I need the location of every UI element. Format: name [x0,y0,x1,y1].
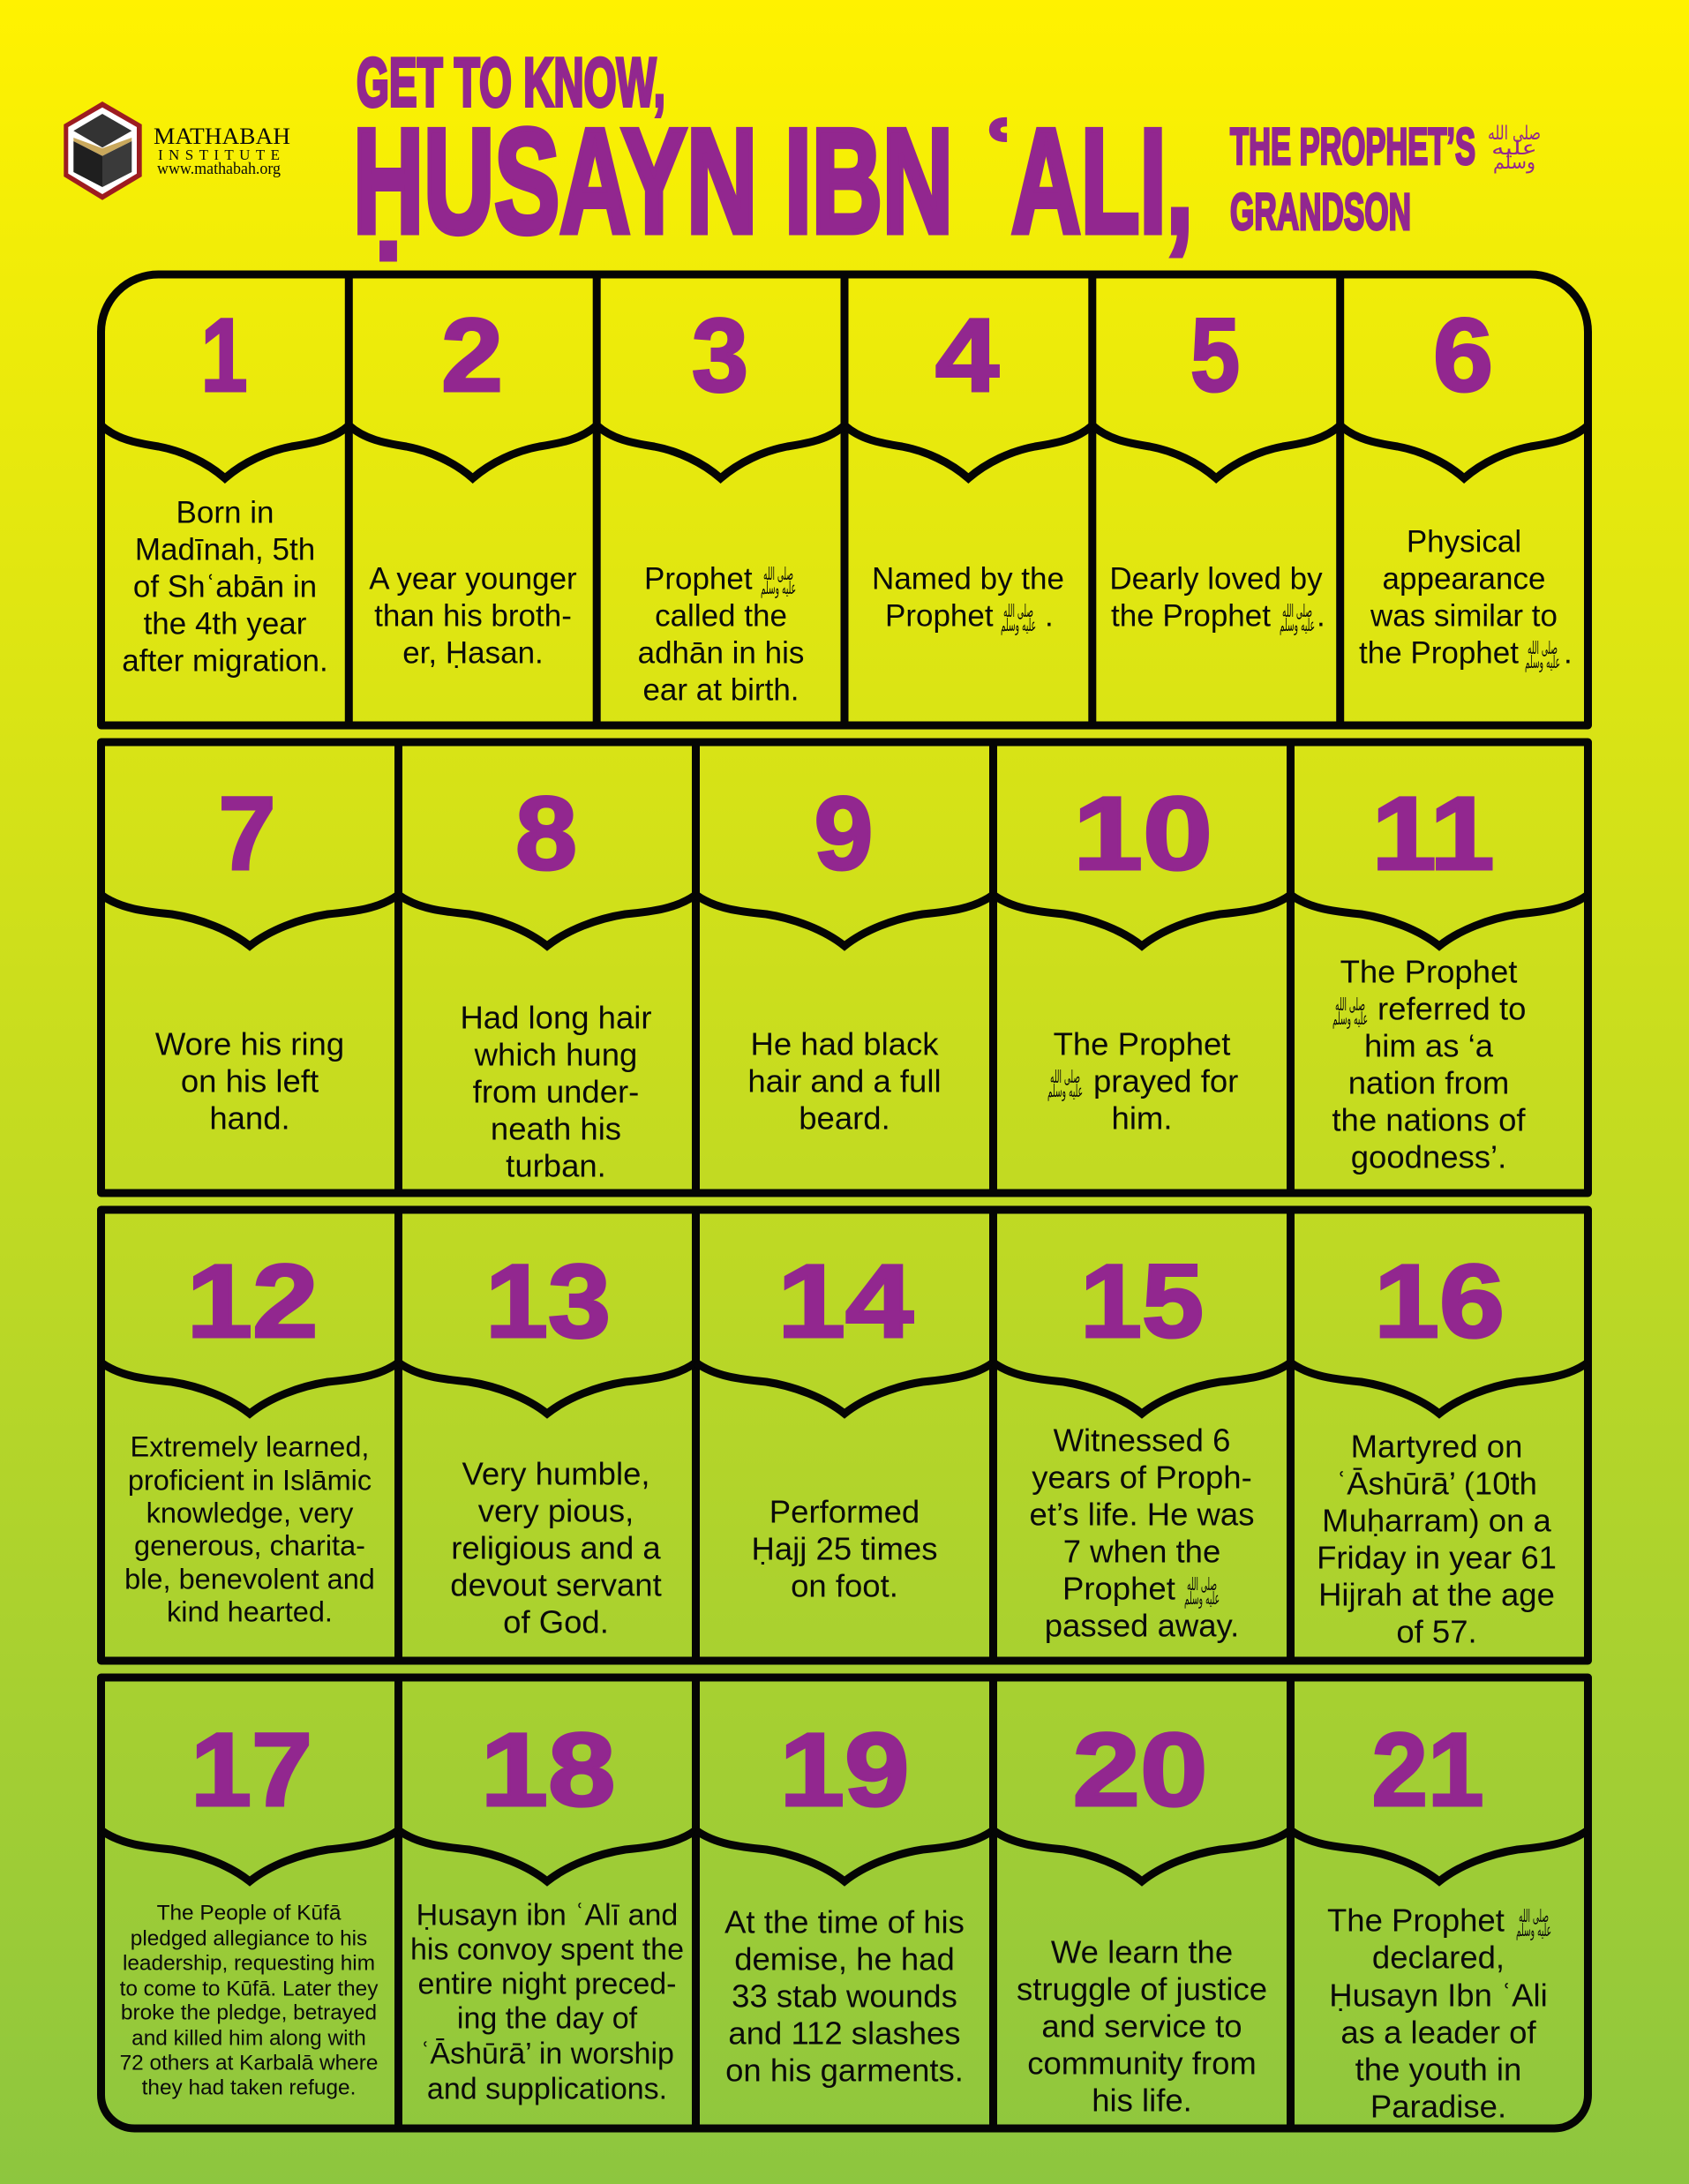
fact 4: . [1045,598,1054,634]
subtitle: the prophet's: THE PROPHET’S [1230,118,1475,176]
fact 11: The Prophet [1340,953,1517,990]
fact 18: entire night preced- [418,1968,676,2001]
fact 12: kind hearted. [167,1595,333,1627]
fact 19: on his garments. [725,2053,964,2088]
fact 1: Madīnah, 5th [135,533,315,567]
icon: honorific [761,563,796,598]
fact 15 [994,1243,1290,1643]
fact 21: Ḥusayn Ibn ʿAli [1329,1977,1548,2014]
fact 14: 14 [777,1243,913,1360]
fact 7: on his left [181,1062,319,1100]
fact 17: 17 [191,1712,312,1828]
fact 8: neath his [491,1110,621,1147]
fact 1: the 4th year [144,607,307,641]
fact 8: 8 [515,776,577,892]
fact 19: demise, he had [734,1941,955,1977]
fact 12: ble, benevolent and [124,1564,375,1595]
fact 19: and 112 slashes [728,2015,961,2051]
fact 18: his convoy spent the [410,1933,684,1966]
fact 15: 15 [1080,1243,1204,1360]
fact 11 [1290,776,1588,1175]
fact 5: . [1317,598,1325,634]
fact 21: declared, [1372,1940,1505,1975]
fact 13: Very humble, [462,1456,650,1491]
fact 7 [101,776,399,1137]
heading: ayn mark: ʿ [976,101,1020,229]
fact 18: ʿĀshūrā’ in worship [420,2037,674,2070]
fact 13: devout servant [450,1567,662,1602]
fact 20: We learn the [1051,1934,1233,1970]
fact 11: 11 [1371,776,1495,892]
fact 18: ing the day of [457,2001,638,2035]
fact 11: referred to [1377,990,1526,1027]
fact 16: Martyred on [1351,1428,1522,1465]
fact 17: and killed him along with [131,2026,366,2051]
fact 12: 12 [187,1243,318,1360]
icon: honorific calligraphy: عليه [1491,138,1537,160]
fact 11: him as ‘a [1364,1027,1494,1064]
fact 11: nation from [1348,1064,1509,1101]
icon: hexagon Kaaba [64,101,142,200]
fact 5: the Prophet [1111,598,1271,634]
fact 17: The People of Kūfā [157,1901,342,1925]
subtitle: grandson: GRANDSON [1230,184,1411,241]
fact 16: Muḥarram) on a [1322,1502,1552,1539]
heading: get to know: GET TO KNOW, [357,43,665,121]
fact 5: Dearly loved by [1109,561,1323,597]
fact 3: adhān in his [638,635,804,671]
fact 21: عليه وسلم [1516,1919,1551,1940]
fact 12: knowledge, very [146,1497,354,1528]
fact 21 [1290,1712,1588,2125]
fact 8 [399,776,695,1184]
logo wordmark: INSTITUTE [158,146,280,163]
fact 17: broke the pledge, betrayed [121,2001,377,2024]
fact 10: him. [1112,1100,1172,1137]
fact 21: the youth in [1355,2051,1521,2088]
fact 3: called the [655,598,787,634]
fact 14 [695,1243,994,1604]
icon: honorific calligraphy: صلى الله [1488,123,1541,145]
fact 21: صلى الله [1519,1905,1549,1926]
fact 6: صلى الله [1528,637,1558,658]
fact 18: and supplications. [427,2072,667,2105]
fact 3: ear at birth. [642,672,799,708]
fact 21: Paradise. [1370,2088,1506,2125]
fact 13: 13 [485,1243,611,1360]
fact 18: 18 [480,1712,616,1828]
fact 14: Performed [769,1493,920,1530]
fact 4: 4 [935,297,999,414]
fact 6: 6 [1433,297,1493,414]
fact 17: to come to Kūfā. Later they [120,1977,379,2001]
fact 3: عليه وسلم [761,577,796,598]
fact 4: صلى الله [1003,600,1033,621]
fact 15: 7 when the [1063,1534,1220,1569]
fact 12: Extremely learned, [131,1431,369,1463]
fact 2: A year younger [369,561,577,597]
fact 20: and service to [1041,2008,1242,2044]
fact 15: صلى الله [1187,1573,1217,1595]
fact 6: appearance [1383,561,1545,597]
fact 19: 33 stab wounds [732,1978,957,2014]
fact 17 [101,1712,399,2100]
heading: Husayn ibn: ḤUSAYN IBN [353,98,953,264]
fact 6: the Prophet [1359,635,1519,671]
fact 20: his life. [1092,2083,1192,2118]
fact 8: turban. [506,1147,606,1184]
fact 15: Prophet [1062,1571,1175,1606]
fact 13: of God. [503,1604,609,1640]
fact 1 [101,297,349,678]
logo wordmark: www.mathabah.org [157,160,281,178]
fact 19 [695,1712,994,2088]
fact 4: عليه وسلم [1001,614,1036,635]
fact 3: صلى الله [763,563,793,584]
fact 20 [994,1712,1290,2118]
fact 9 [695,776,994,1137]
fact 17: leadership, requesting him [123,1952,375,1975]
fact 17: 72 others at Karbalā where [120,2051,378,2075]
fact 18: Ḥusayn ibn ʿAlī and [417,1899,678,1933]
fact 6: . [1564,635,1573,671]
fact 15: et’s life. He was [1030,1497,1254,1532]
fact 11: صلى الله [1335,994,1365,1015]
fact 2 [349,297,597,671]
fact 12: generous, charita- [134,1530,365,1562]
fact 6: was similar to [1370,598,1558,634]
title [353,43,1541,264]
fact 8: from under- [473,1073,639,1110]
fact 19: 19 [780,1712,909,1828]
fact 3 [597,297,844,708]
fact 6: Physical [1407,524,1521,559]
fact 8: which hung [474,1036,637,1073]
fact 9: He had black [750,1025,939,1062]
panel: row 2 facts [101,742,1588,1193]
fact 9: beard. [799,1100,890,1137]
fact 5: عليه وسلم [1280,614,1315,635]
fact 16 [1290,1243,1588,1650]
fact 5: صلى الله [1282,600,1312,621]
icon: honorific [1332,994,1368,1029]
fact 4: Prophet [885,598,994,634]
fact 3: Prophet [644,561,753,597]
fact 4 [844,297,1092,635]
icon: honorific [1525,637,1560,672]
fact 16: 16 [1374,1243,1505,1360]
fact 9: hair and a full [747,1062,942,1100]
fact 2: er, Ḥasan. [402,635,544,671]
fact 11: عليه وسلم [1332,1008,1368,1029]
fact 3: 3 [692,297,748,414]
icon: honorific [1184,1573,1220,1609]
fact 16: Hijrah at the age [1318,1576,1555,1613]
fact 18 [399,1712,695,2105]
fact 15: years of Proph- [1032,1460,1252,1495]
fact 14: on foot. [791,1567,898,1604]
fact 6 [1340,297,1588,672]
icon: honorific calligraphy [1488,123,1541,174]
fact 1: of Shʿabān in [133,570,317,604]
fact 11: goodness’. [1351,1138,1506,1175]
fact 21: The Prophet [1327,1903,1505,1938]
fact 1: Born in [176,496,274,529]
fact 20: struggle of justice [1017,1971,1267,2007]
icon: honorific [1001,600,1036,635]
fact 12 [101,1243,399,1627]
fact 17: pledged allegiance to his [131,1927,367,1950]
panel: row 1 facts [101,274,1588,725]
fact 4: Named by the [872,561,1064,597]
fact 2: than his broth- [374,598,572,634]
fact 17: they had taken refuge. [142,2075,356,2100]
fact 20: 20 [1073,1712,1207,1828]
fact 2: 2 [441,297,503,414]
heading: Ali: ALI, [1011,98,1193,264]
panel: row 3 facts [101,1210,1588,1661]
fact 14: Ḥajj 25 times [752,1530,937,1567]
fact 7: Wore his ring [155,1025,344,1062]
fact 5: 5 [1190,297,1240,414]
fact 13: very pious, [478,1493,634,1528]
fact 13: religious and a [451,1530,661,1565]
fact 9: 9 [814,776,874,892]
logo: Mathabah Institute [64,101,290,200]
fact 20: community from [1027,2045,1257,2081]
fact 10: The Prophet [1054,1025,1230,1062]
icon: honorific calligraphy: وسلم [1493,152,1535,174]
fact 5 [1092,297,1340,635]
panel: row 4 facts [101,1677,1588,2128]
fact 7: hand. [209,1100,290,1137]
fact 10: prayed for [1093,1062,1238,1100]
fact 6: عليه وسلم [1525,651,1560,672]
fact 21: 21 [1371,1712,1484,1828]
fact 16: ʿĀshūrā’ (10th [1336,1465,1537,1502]
icon: honorific [1047,1066,1083,1101]
fact 8: Had long hair [460,999,652,1036]
fact 10: عليه وسلم [1047,1080,1083,1101]
fact 10 [994,776,1290,1137]
fact 10: صلى الله [1050,1066,1080,1087]
fact 15: Witnessed 6 [1054,1422,1230,1458]
fact 11: the nations of [1332,1101,1526,1138]
fact 15: عليه وسلم [1184,1587,1220,1609]
fact 21: as a leader of [1340,2014,1536,2051]
fact 7: 7 [219,776,275,892]
fact 16: Friday in year 61 [1317,1539,1557,1576]
fact 15: passed away. [1045,1608,1239,1643]
icon: honorific [1516,1905,1551,1940]
logo wordmark: MATHABAH [154,124,290,149]
fact 10: 10 [1073,776,1212,892]
fact 19: At the time of his [724,1904,965,1940]
logo wordmark [154,124,290,178]
fact 13 [399,1243,695,1640]
icon: honorific [1280,600,1315,635]
fact 16: of 57. [1396,1613,1477,1650]
fact 1: 1 [201,297,247,414]
fact 1: after migration. [122,644,328,678]
fact 12: proficient in Islāmic [128,1465,372,1497]
